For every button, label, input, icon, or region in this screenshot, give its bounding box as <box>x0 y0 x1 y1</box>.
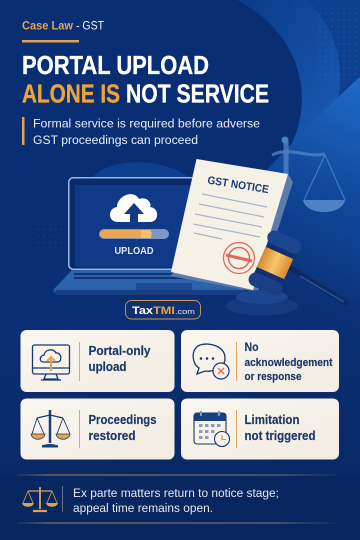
logo: TaxTMI.com <box>126 300 200 319</box>
notice heading: GST NOTICE <box>207 175 270 196</box>
title: NOT SERVICE <box>126 78 269 108</box>
icon: gold scales <box>22 487 58 511</box>
card label: No <box>244 340 258 354</box>
gavel <box>226 228 346 316</box>
laptop lid <box>68 177 198 270</box>
card: limitation not triggered <box>181 398 339 460</box>
icon: scales of justice <box>31 410 70 448</box>
footer text: Ex parte matters return to notice stage; <box>73 486 279 500</box>
subtitle: Formal service is required before adverse <box>33 116 260 130</box>
footer text <box>73 486 279 515</box>
logo: TaxTMI.com: Tax <box>132 305 154 317</box>
logo: TaxTMI.com: TMI <box>153 305 175 317</box>
logo: TaxTMI.com: .com <box>175 307 195 316</box>
icon: monitor with cloud <box>32 345 70 380</box>
card label: or response <box>244 371 302 383</box>
card: proceedings restored <box>20 398 174 460</box>
card label <box>88 413 157 443</box>
subtitle <box>22 116 260 147</box>
card label: Proceedings <box>88 413 157 427</box>
upload label: UPLOAD <box>114 245 154 257</box>
footer band <box>0 474 360 524</box>
subtitle: GST proceedings can proceed <box>33 133 198 147</box>
title: ALONE IS <box>22 78 120 108</box>
gavel block <box>226 296 298 316</box>
card label: Portal-only <box>88 344 151 358</box>
background scales watermark <box>272 136 345 212</box>
title: PORTAL UPLOAD <box>22 50 209 80</box>
card label: not triggered <box>244 429 316 443</box>
laptop base <box>54 270 245 293</box>
card label <box>244 413 316 443</box>
card label: acknowledgement <box>244 357 333 369</box>
laptop <box>54 177 245 295</box>
card label: restored <box>88 429 136 443</box>
notice text lines <box>193 194 267 239</box>
eyebrow: Case Law - GST: Case Law <box>22 20 73 32</box>
card: portal-only upload <box>20 330 174 392</box>
card label: Limitation <box>244 413 300 427</box>
gavel head <box>246 228 304 298</box>
progress bar <box>99 229 169 239</box>
eyebrow: Case Law - GST: - GST <box>76 20 104 32</box>
card label <box>88 344 151 374</box>
accent bar <box>22 40 79 42</box>
red stamp <box>224 242 254 274</box>
footer text: appeal time remains open. <box>73 501 213 515</box>
gavel handle <box>290 268 346 303</box>
icon: upload cloud <box>110 194 157 222</box>
card label: upload <box>88 360 126 374</box>
icon: chat with x <box>193 344 229 379</box>
notice document <box>170 159 293 292</box>
eyebrow: Case Law - GST <box>22 20 104 32</box>
icon: calendar with clock <box>194 411 230 446</box>
card label <box>244 340 333 383</box>
card: no acknowledgement <box>181 330 339 392</box>
title <box>22 50 269 108</box>
